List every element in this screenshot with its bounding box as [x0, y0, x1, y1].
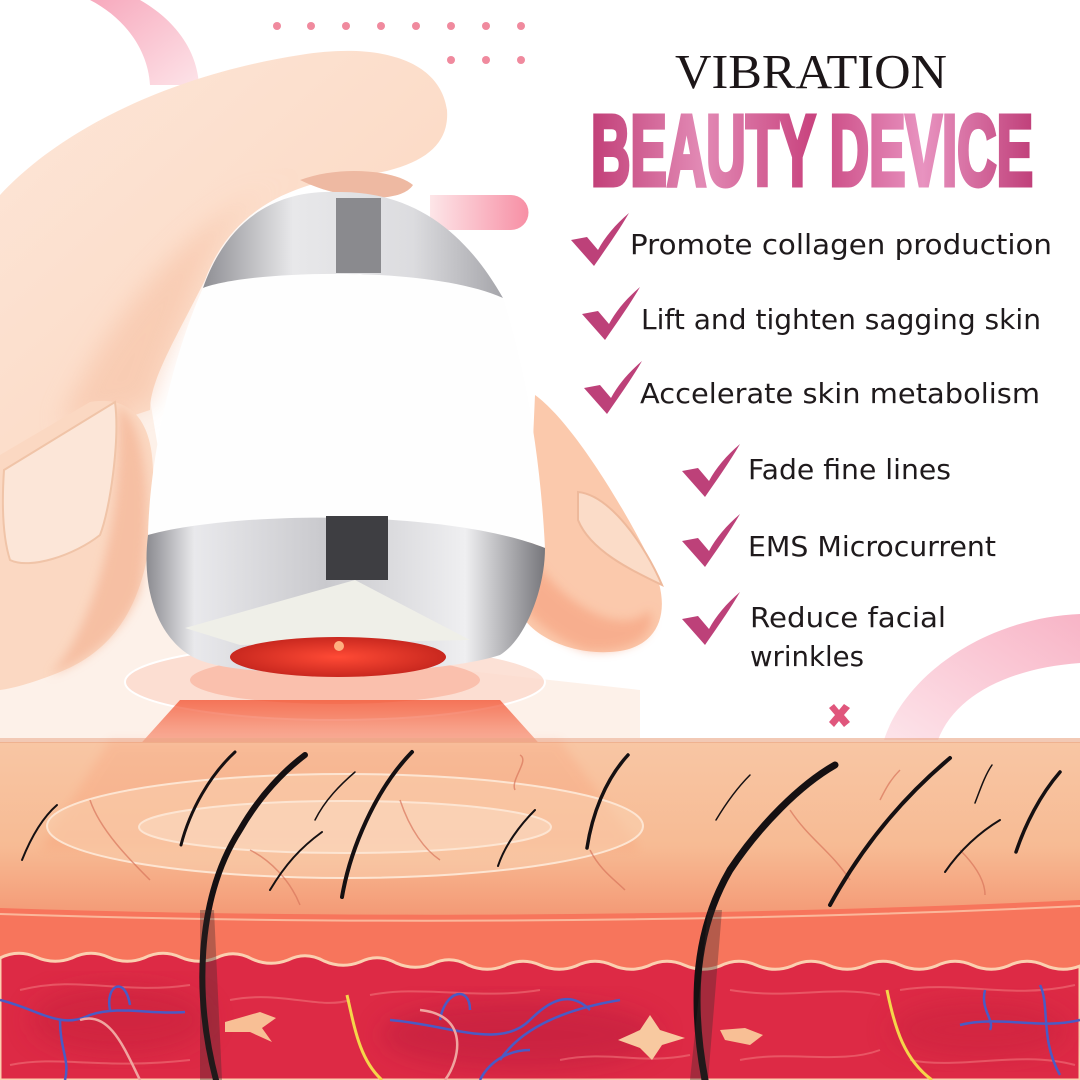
lower metal body — [147, 518, 545, 673]
item: fine lines: Fade fine lines — [748, 453, 951, 486]
item: metabolism: Accelerate skin metabolism — [640, 377, 1040, 410]
large hairs — [22, 752, 1060, 1080]
red blotches — [30, 985, 210, 1055]
item: EMS: EMS Microcurrent — [748, 530, 996, 563]
right finger shading — [525, 560, 652, 651]
dermis layer — [0, 900, 1080, 985]
item: collagen — [571, 213, 1052, 266]
decorative dot grid — [273, 22, 525, 64]
item: EMS — [682, 514, 996, 567]
icon: pink cross — [829, 704, 850, 727]
device — [147, 192, 545, 677]
deep tissue — [0, 953, 1080, 1080]
item: lift: Lift and tighten sagging skin — [641, 303, 1041, 336]
item: wrinkles — [682, 592, 946, 673]
palm — [0, 400, 640, 738]
finger shading — [60, 175, 300, 425]
decorative pill — [430, 195, 528, 230]
fine reddish hairs — [90, 755, 985, 905]
index finger — [0, 51, 447, 460]
thumb nail — [3, 402, 116, 563]
red light beam — [90, 700, 590, 800]
heading — [591, 44, 1033, 207]
item: wrinkles: wrinkles — [750, 640, 864, 673]
heading: VIBRATION — [675, 44, 947, 99]
item: wrinkles: Reduce facial — [750, 601, 946, 634]
item: lift — [582, 287, 1041, 340]
blood vessels — [0, 985, 1080, 1080]
right finger — [525, 395, 662, 652]
item: metabolism — [584, 361, 1040, 414]
hand holding device — [0, 51, 662, 738]
ripple rings on skin — [47, 774, 643, 878]
red lens — [230, 637, 446, 677]
red beam overlay — [40, 740, 640, 850]
item: collagen: Promote collagen production — [630, 228, 1052, 261]
top metal cap — [203, 192, 503, 298]
thumb shading — [50, 405, 147, 675]
follicle sheaths — [200, 910, 222, 1080]
white band — [148, 274, 545, 548]
hair follicle cells — [225, 1012, 276, 1042]
decorative arc top left — [90, 0, 199, 85]
ripple rings under device — [125, 644, 545, 720]
item: fine lines — [682, 444, 951, 497]
skin cross-section — [0, 738, 1080, 1080]
nail on top of device — [300, 171, 413, 198]
benefits checklist — [571, 213, 1052, 673]
pale tissue streaks — [10, 984, 1075, 1065]
right fingernail — [578, 492, 662, 585]
thumb — [0, 401, 153, 690]
decorative arc right — [884, 614, 1080, 740]
epidermis surface — [0, 742, 1080, 915]
